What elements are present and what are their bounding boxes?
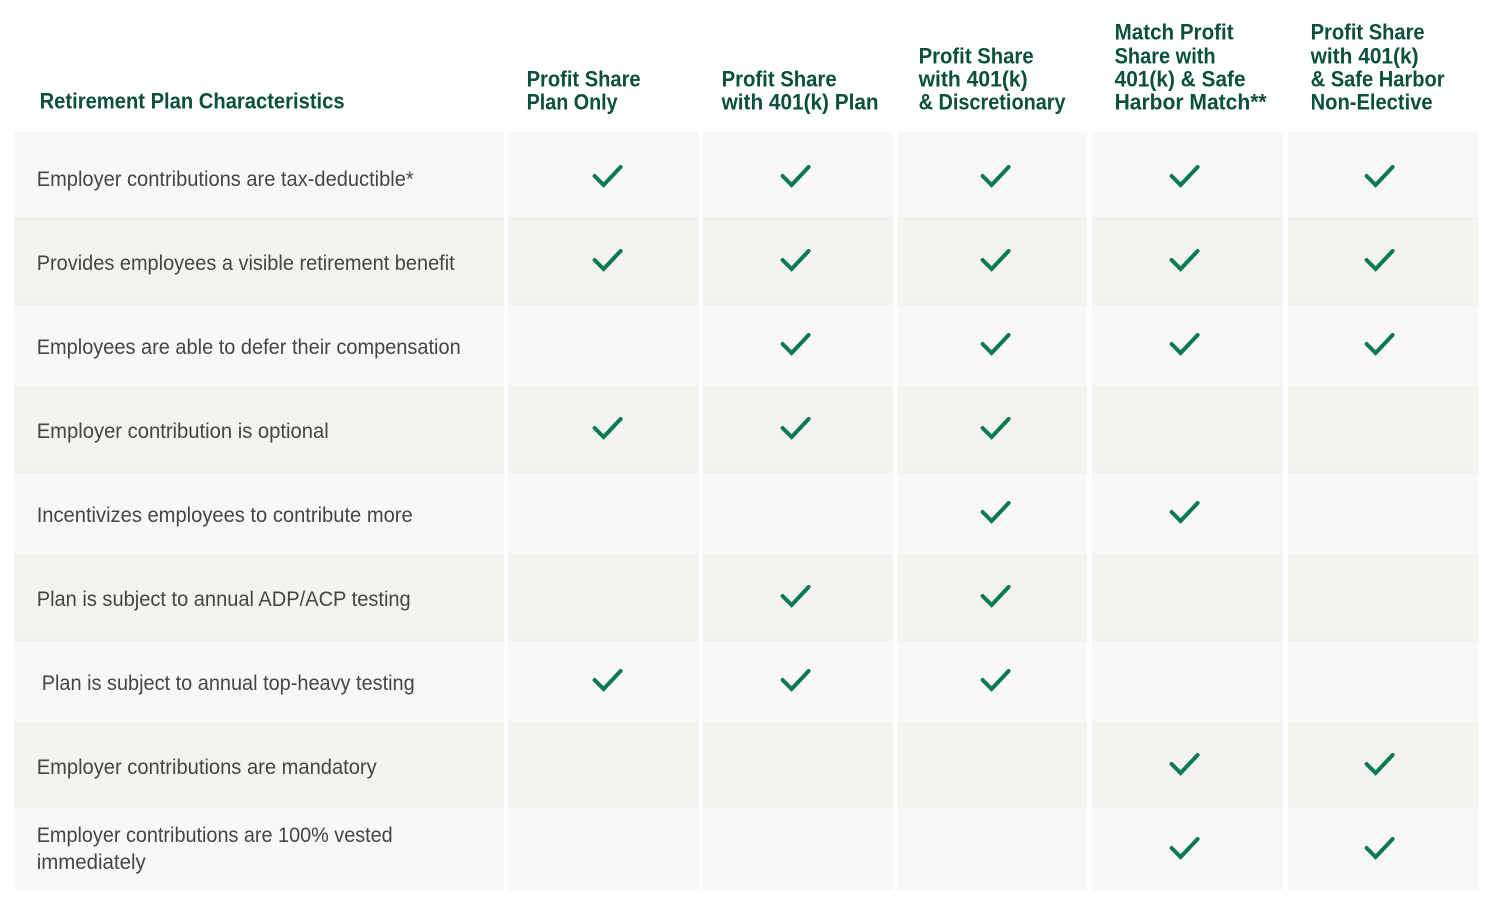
row 1 label: Employer contributions are tax-deductible* [37, 167, 414, 191]
row 1: tax-deductible [14, 132, 1478, 217]
column heading: profit share with 401(k) and safe harbor non-elective: with 401(k) [1310, 44, 1419, 68]
column heading: profit share with 401(k) and discretionary: with 401(k) [918, 66, 1028, 92]
row 8 label: Employer contributions are mandatory [37, 755, 377, 779]
column heading: profit share with 401(k) and safe harbor non-elective: Non-Elective [1311, 90, 1433, 114]
row 7 checks [595, 671, 1009, 689]
row 2 label: Provides employees a visible retirement benefit [37, 251, 455, 275]
row 4 checks [595, 419, 1009, 437]
row 9 label: immediately [37, 850, 146, 874]
row 7 label: Plan is subject to annual top-heavy testing [42, 671, 415, 695]
column heading: profit share plan only: Profit Share [527, 66, 641, 92]
column heading: match profit share with 401(k) and safe harbor match: Harbor Match** [1115, 90, 1267, 114]
column heading: match profit share with 401(k) and safe harbor match: 401(k) & Safe [1115, 66, 1246, 92]
column heading: profit share with 401(k) plan: Profit Share [722, 66, 837, 92]
row 5: incentivizes employees [14, 470, 1478, 554]
heading: retirement plan characteristics: Retirement Plan Characteristics [40, 88, 345, 114]
row 3: defer compensation [14, 302, 1478, 386]
column heading: profit share with 401(k) and discretionary [918, 44, 1066, 114]
column heading: profit share with 401(k) and safe harbor non-elective [1310, 20, 1445, 114]
column heading: match profit share with 401(k) and safe harbor match: Match Profit [1115, 20, 1234, 44]
row 9 label: Employer contributions are 100% vested [37, 823, 393, 847]
row 3 label: Employees are able to defer their compensation [37, 335, 461, 359]
column heading: match profit share with 401(k) and safe harbor match [1115, 20, 1267, 114]
row 5 label: Incentivizes employees to contribute more [37, 503, 413, 527]
column heading: profit share with 401(k) plan: with 401(k) Plan [721, 90, 879, 114]
row 3 checks [783, 335, 1393, 353]
row 8: contributions mandatory [14, 722, 1478, 808]
row 4: contribution optional [14, 386, 1478, 470]
row 7: top-heavy testing [14, 638, 1478, 722]
column heading: profit share with 401(k) and safe harbor non-elective: & Safe Harbor [1311, 66, 1445, 92]
row 6 checks [783, 587, 1009, 605]
column heading: profit share with 401(k) plan [721, 66, 879, 114]
row 4 label: Employer contribution is optional [37, 419, 329, 443]
row 6 label: Plan is subject to annual ADP/ACP testing [37, 587, 411, 611]
row 9: 100% vested [14, 808, 1478, 890]
row 8 checks [1172, 755, 1393, 773]
column heading: profit share plan only [527, 66, 641, 114]
column heading: profit share with 401(k) and discretionary: & Discretionary [919, 90, 1066, 114]
row 9 label [37, 823, 393, 874]
row 2: visible benefit [14, 217, 1478, 302]
row 6: ADP/ACP testing [14, 554, 1478, 638]
column heading: profit share plan only: Plan Only [527, 90, 618, 114]
row 5 checks [983, 503, 1198, 521]
row 9 checks [1172, 839, 1393, 857]
column heading: profit share with 401(k) and discretionary: Profit Share [919, 44, 1034, 68]
column heading: profit share with 401(k) and safe harbor non-elective: Profit Share [1311, 20, 1425, 44]
header row [40, 20, 1445, 114]
row 1 checks [595, 167, 1393, 185]
column heading: match profit share with 401(k) and safe harbor match: Share with [1115, 44, 1216, 68]
row 2 checks [595, 251, 1393, 269]
